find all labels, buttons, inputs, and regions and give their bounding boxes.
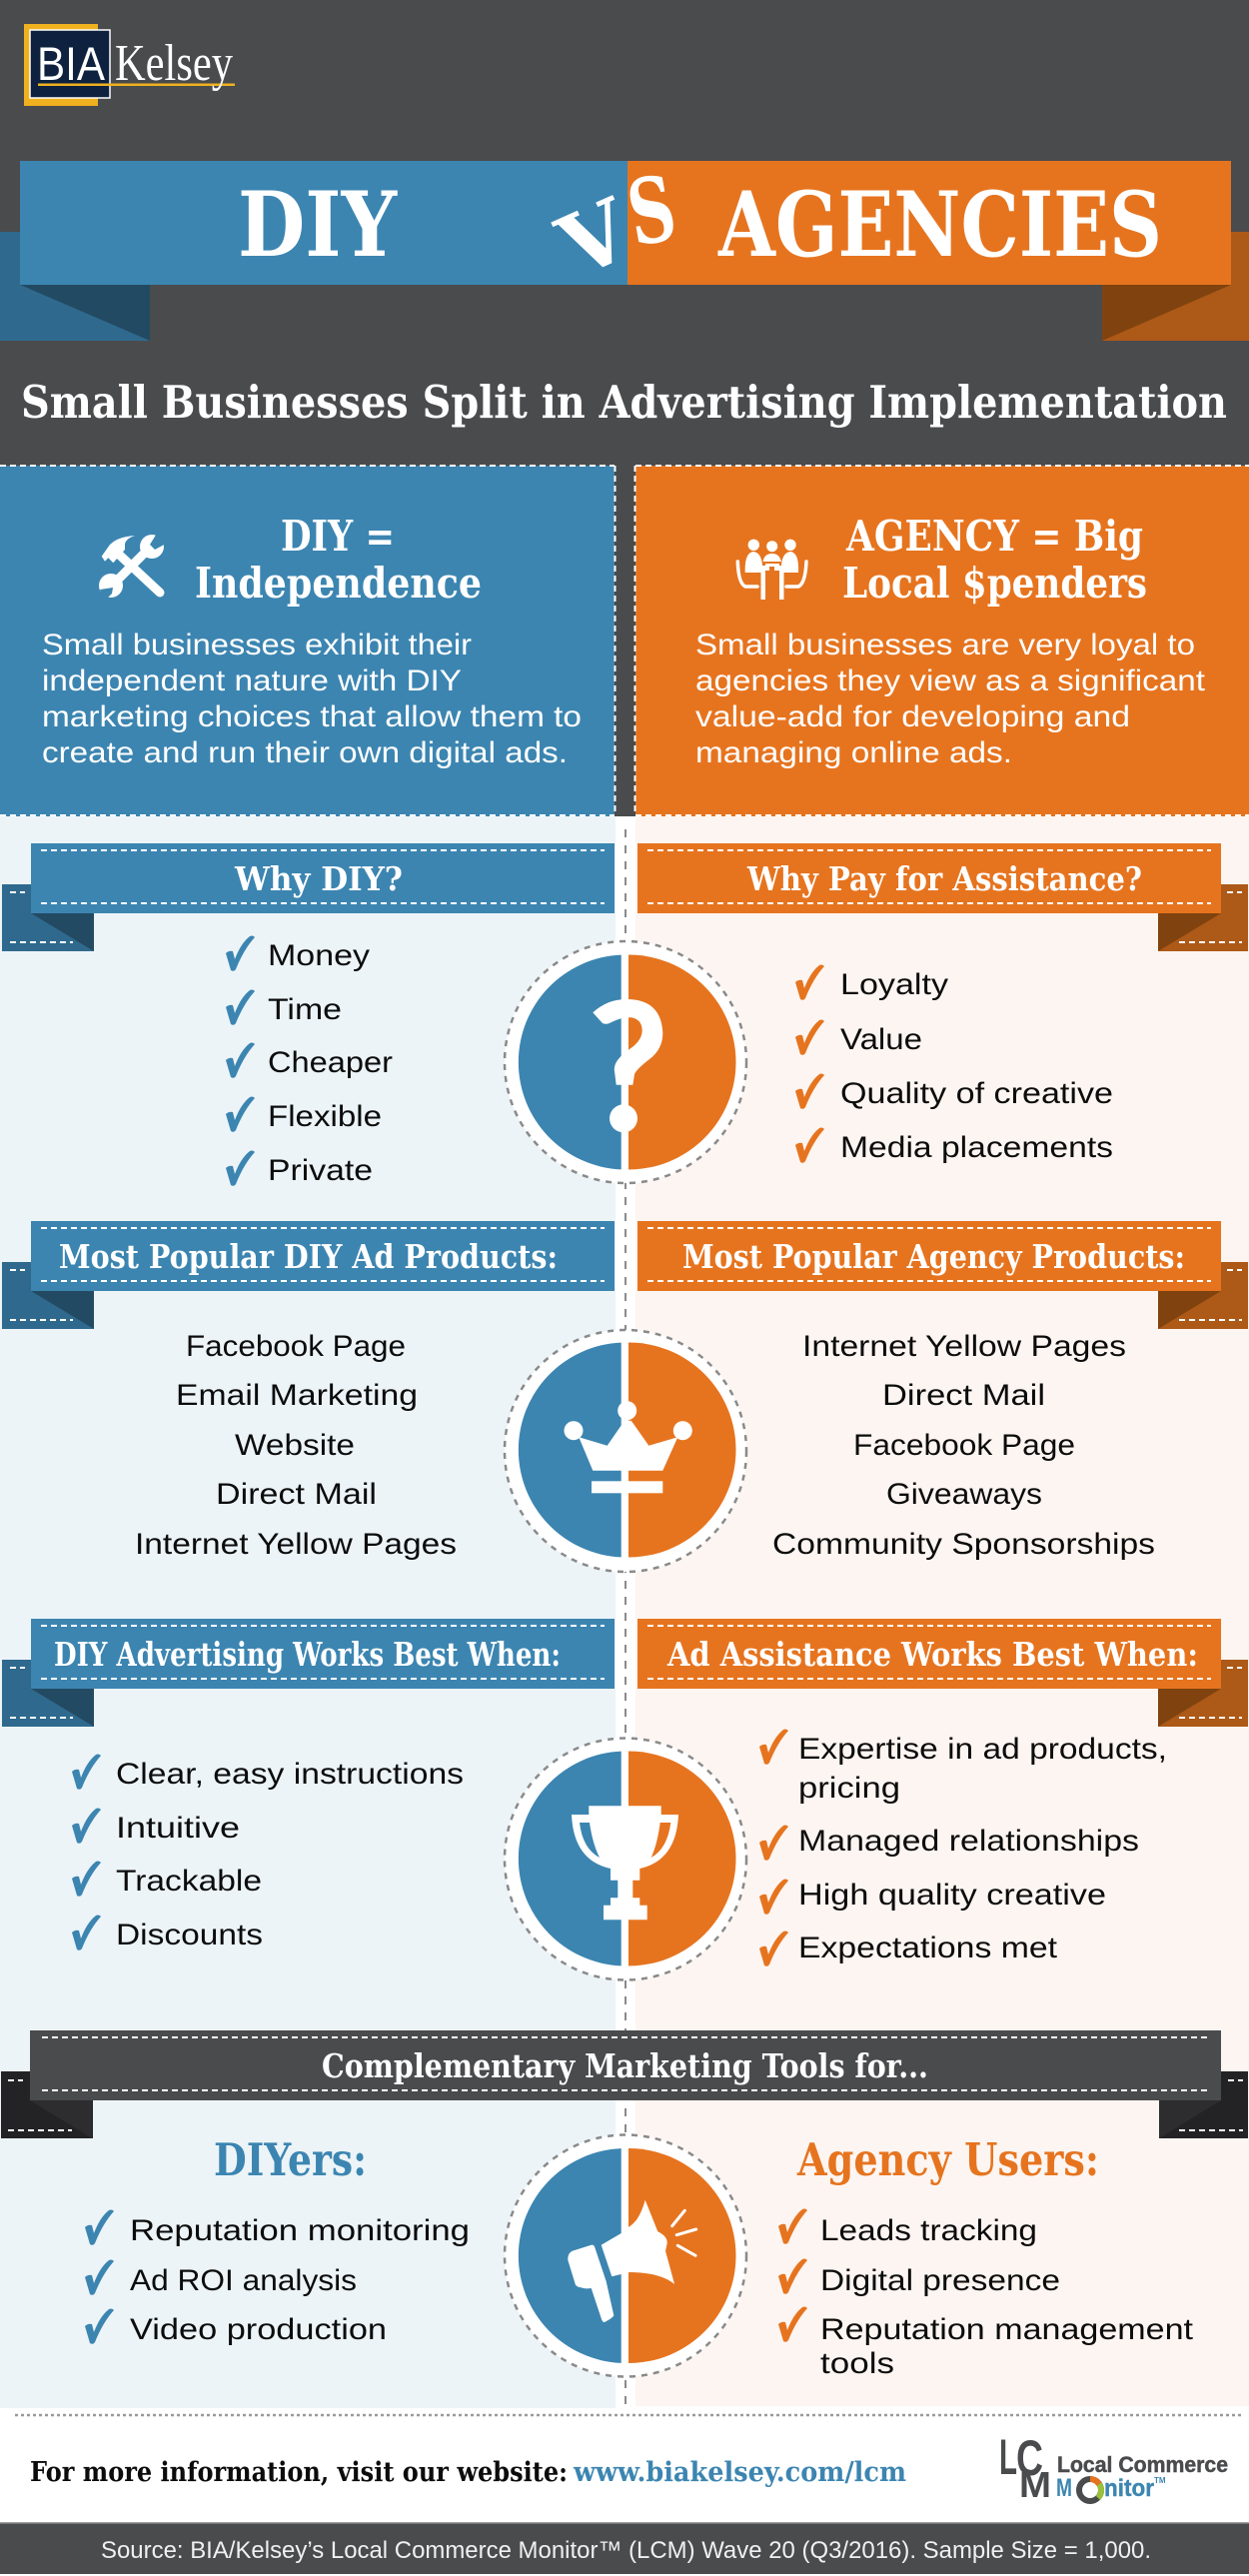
logo: BIA Kelsey: BIA: [37, 37, 106, 90]
ribbon: Why Pay for Assistance?: [637, 843, 1248, 951]
panel: DIY = Independence: [0, 466, 616, 816]
title banner: DIY vs Agencies: AGENCIES: [717, 172, 1162, 278]
list: Why DIY: [226, 935, 393, 1187]
text block: DIY description: marketing choices that allow them to: [42, 700, 582, 733]
list: Agency products: Giveaways: [886, 1478, 1042, 1511]
header background: [0, 0, 1249, 816]
text block: DIY description: [42, 629, 582, 769]
list: Assistance works best when: High quality creative: [798, 1879, 1106, 1912]
ribbon: Most Popular Agency Products: Most Popular Agency Products:: [682, 1237, 1185, 1276]
list: Agency user tools: Leads tracking: [820, 2214, 1037, 2247]
list: DIY products: Internet Yellow Pages: [135, 1528, 457, 1561]
footer call to action: www.biakelsey.com/lcm: [573, 2457, 906, 2488]
text block: Agency description: value-add for developing and: [695, 700, 1130, 733]
list: Why Pay for Assistance: Quality of creative: [840, 1077, 1113, 1110]
list: Why DIY: Flexible: [268, 1100, 382, 1133]
list: Assistance works best when: Expertise in ad products,: [798, 1733, 1167, 1766]
list: Assistance works best when: pricing: [798, 1772, 900, 1805]
list: DIYer tools: Ad ROI analysis: [130, 2264, 357, 2297]
title banner: DIY vs Agencies: V: [544, 179, 647, 299]
footer call to action: [30, 2457, 906, 2488]
list: Agency products: [772, 1330, 1155, 1561]
title banner: DIY vs Agencies: DIY: [238, 172, 399, 278]
heading: DIY = Independence: DIY =: [281, 512, 395, 561]
body backgrounds: [0, 816, 1249, 2408]
list: DIY works best when: Discounts: [116, 1919, 263, 1951]
ribbon: Complementary Marketing Tools: [1, 2030, 1248, 2138]
ribbon: Most Popular Agency Products: [637, 1221, 1248, 1329]
list: DIY products: [135, 1330, 457, 1561]
logo: Local Commerce Monitor: Local Commerce: [1057, 2452, 1228, 2477]
ribbon: Why DIY?: [2, 843, 615, 951]
panel: Agency = Big Local Spenders: [635, 466, 1249, 816]
list: DIY works best when: Trackable: [116, 1865, 262, 1898]
title banner: DIY vs Agencies: [0, 155, 1249, 341]
heading: DIY = Independence: Independence: [195, 559, 482, 608]
list: Why DIY: Money: [268, 939, 370, 972]
heading: Agency Users: Agency Users:: [796, 2133, 1099, 2186]
list: Assistance works best when: Managed relationships: [798, 1825, 1139, 1858]
text block: DIY description: Small businesses exhibit their: [42, 629, 472, 661]
text block: Agency description: agencies they view as a significant: [695, 664, 1206, 697]
list: Why DIY: Cheaper: [268, 1046, 393, 1079]
list: Agency products: Internet Yellow Pages: [802, 1330, 1126, 1363]
circle icon: trophy: [505, 1739, 746, 1980]
list: Agency user tools: Reputation management: [820, 2313, 1194, 2346]
ribbon: Most Popular DIY Ad Products: Most Popular DIY Ad Products:: [59, 1237, 558, 1276]
list: Agency products: Community Sponsorships: [772, 1528, 1155, 1561]
list: Why DIY: Time: [268, 993, 342, 1026]
list: DIY works best when: Intuitive: [116, 1812, 240, 1845]
list: DIY products: Email Marketing: [176, 1379, 418, 1412]
list: DIYer tools: Reputation monitoring: [130, 2214, 470, 2247]
text block: DIY description: create and run their own digital ads.: [42, 736, 568, 769]
text block: Agency description: managing online ads.: [695, 736, 1012, 769]
list: DIY products: Website: [235, 1429, 355, 1462]
icon: people at a table: [737, 540, 806, 600]
logo: BIA Kelsey: Kelsey: [115, 35, 233, 92]
footer call to action: For more information, visit our website:: [30, 2457, 568, 2488]
list: Agency products: Facebook Page: [853, 1429, 1075, 1462]
footer dotted rule: [15, 2414, 1244, 2416]
circle icon: crown: [505, 1330, 746, 1572]
list: DIYer tools: [85, 2209, 470, 2346]
text block: Agency description: [695, 629, 1206, 769]
logo: Local Commerce Monitor: M: [1019, 2464, 1051, 2505]
list: Why Pay for Assistance: [795, 964, 1113, 1164]
icon: hammer and wrench: [99, 532, 168, 602]
heading: Agency = Big Local Spenders: AGENCY = Big: [845, 512, 1143, 561]
list: Why DIY: Private: [268, 1154, 373, 1187]
list: DIY works best when: [72, 1754, 464, 1951]
list: Agency user tools: tools: [820, 2347, 894, 2380]
logo: Local Commerce Monitor: C: [1016, 2430, 1043, 2486]
logo: Local Commerce Monitor: TM: [1154, 2476, 1166, 2485]
list: Why Pay for Assistance: Loyalty: [840, 968, 948, 1001]
heading: Agency = Big Local Spenders: [842, 512, 1147, 608]
heading: DIY = Independence: [195, 512, 482, 608]
logo: Local Commerce Monitor: M: [1056, 2474, 1072, 2502]
list: DIY products: Facebook Page: [186, 1330, 406, 1363]
list: DIYer tools: Video production: [130, 2313, 387, 2346]
logo: Local Commerce Monitor: [999, 2429, 1228, 2505]
heading: Agency = Big Local Spenders: Local $penders: [842, 559, 1147, 608]
list: DIY products: Direct Mail: [216, 1478, 377, 1511]
ribbon: DIY Advertising Works Best When: [2, 1619, 615, 1727]
list: Agency user tools: [778, 2208, 1194, 2380]
ribbon: Why Pay for Assistance?: Why Pay for Assistance?: [746, 859, 1142, 898]
logo: Local Commerce Monitor: nitor: [1104, 2475, 1154, 2502]
logo: BIA Kelsey: [24, 24, 235, 106]
list: Why Pay for Assistance: Value: [840, 1023, 922, 1056]
title banner: DIY vs Agencies: S: [620, 155, 683, 268]
list: Why Pay for Assistance: Media placements: [840, 1131, 1113, 1164]
list: Agency products: Direct Mail: [882, 1379, 1045, 1412]
list: Assistance works best when: Expectations met: [798, 1932, 1058, 1964]
ribbon: Why DIY?: Why DIY?: [234, 859, 403, 898]
source bar: [0, 2522, 1249, 2574]
ribbon: Ad Assistance Works Best When: [637, 1619, 1248, 1727]
logo: Local Commerce Monitor: L: [999, 2429, 1017, 2485]
list: Assistance works best when: [759, 1729, 1167, 1966]
list: DIY works best when: Clear, easy instructions: [116, 1758, 464, 1791]
ribbon: Complementary Marketing Tools: Complementary Marketing Tools for...: [322, 2046, 928, 2085]
list: Agency user tools: Digital presence: [820, 2264, 1060, 2297]
text block: DIY description: independent nature with DIY: [42, 664, 462, 697]
circle icon: question mark: [505, 941, 746, 1183]
circle icon: megaphone: [505, 2134, 746, 2376]
ribbon: DIY Advertising Works Best When: DIY Advertising Works Best When:: [54, 1635, 561, 1674]
text block: Agency description: Small businesses are very loyal to: [695, 629, 1195, 661]
ribbon: Most Popular DIY Ad Products: [2, 1221, 615, 1329]
heading: DIYers: DIYers:: [214, 2133, 367, 2186]
source bar: Source: BIA/Kelsey’s Local Commerce Monitor™ (LCM) Wave 20 (Q3/2016). Sample Size = 1,000.: [101, 2537, 1151, 2564]
